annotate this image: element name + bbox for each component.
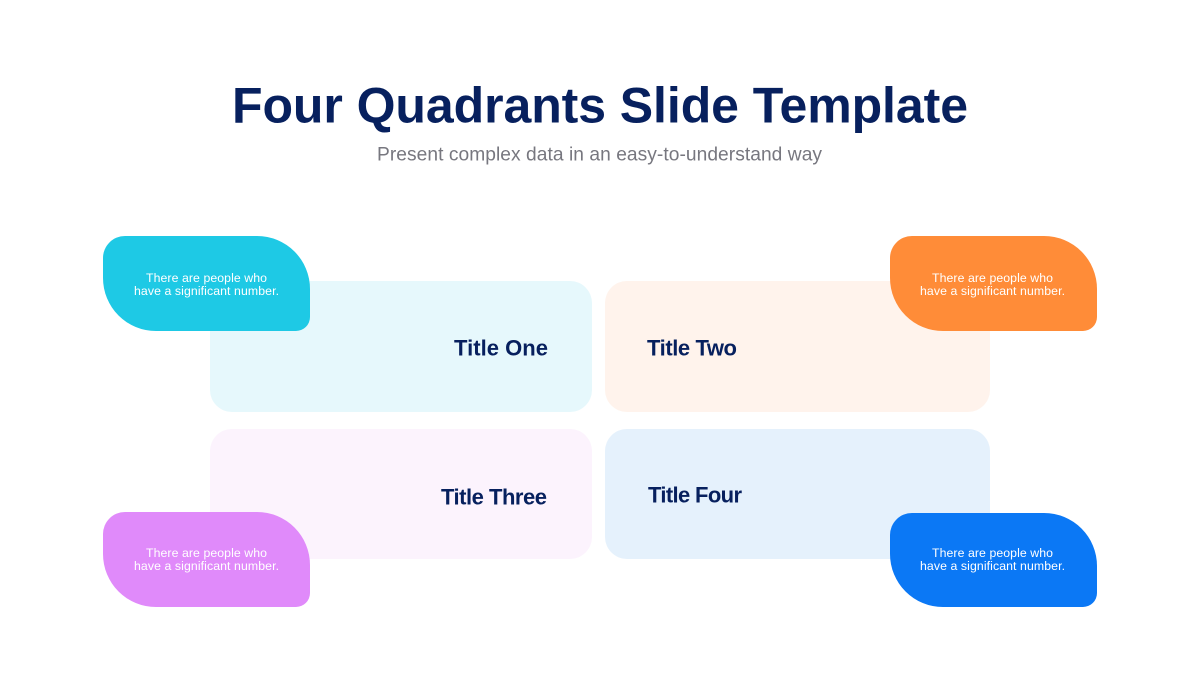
heading: title four: Title Four (648, 482, 742, 508)
callout: blue (890, 513, 1097, 607)
callout: cyan (103, 236, 310, 331)
heading: title one: Title One (454, 336, 548, 360)
callout: orange: There are people who (932, 271, 1053, 285)
callout: orange (890, 236, 1097, 331)
callout: purple (103, 512, 310, 607)
callout: purple: There are people who (146, 546, 267, 560)
heading: title three: Title Three (441, 484, 547, 510)
subtitle: Present complex data in an easy-to-understand way (377, 144, 822, 166)
heading: title two: Title Two (647, 336, 737, 360)
callout: blue: have a significant number. (920, 559, 1065, 573)
callout: orange: have a significant number. (920, 284, 1065, 298)
title: Four Quadrants Slide Template (232, 78, 968, 134)
callout: cyan: have a significant number. (134, 284, 279, 298)
panel: title four (605, 429, 990, 559)
callout: cyan: There are people who (146, 271, 267, 285)
callout: blue: There are people who (932, 546, 1053, 560)
panel: title two (605, 281, 990, 412)
callout: purple: have a significant number. (134, 559, 279, 573)
panel: title three (210, 429, 592, 559)
panel: title one (210, 281, 592, 412)
